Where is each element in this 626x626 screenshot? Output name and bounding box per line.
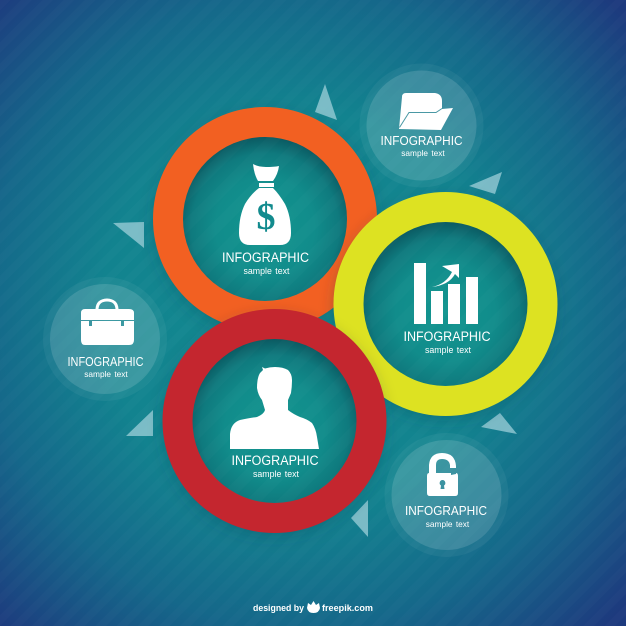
label: folder: sample text (401, 148, 445, 158)
triangle upper right (469, 172, 502, 194)
label: money (222, 250, 309, 276)
small circle: briefcase (43, 277, 167, 401)
label: chart: sample text (425, 345, 472, 355)
triangle bottom (351, 500, 368, 537)
triangle lower left (126, 410, 153, 436)
label: chart (404, 329, 491, 355)
triangles (113, 84, 517, 537)
icon: money bag (239, 164, 291, 245)
small circle: padlock (384, 433, 508, 557)
label: money: INFOGRAPHIC (222, 250, 309, 265)
label: briefcase: INFOGRAPHIC (68, 355, 144, 369)
ring: yellow (333, 192, 558, 421)
label: money: sample text (244, 266, 290, 276)
triangle top (315, 84, 337, 120)
triangle lower right (481, 413, 517, 434)
label: chart: INFOGRAPHIC (404, 329, 491, 344)
icon: bar chart (414, 263, 478, 324)
arrow (432, 264, 459, 287)
icon: folder (399, 93, 453, 130)
label: briefcase: sample text (84, 369, 128, 379)
credit (253, 601, 373, 613)
label: person (232, 453, 319, 479)
label: person: INFOGRAPHIC (232, 453, 319, 468)
label: folder (380, 134, 462, 158)
icon: person (230, 367, 319, 449)
ring: red (162, 309, 386, 538)
icon: padlock (427, 453, 458, 496)
small circle: folder (360, 64, 484, 188)
label: folder: INFOGRAPHIC (380, 134, 462, 148)
ring: orange (153, 107, 377, 336)
label: person: sample text (253, 469, 300, 479)
triangle left (113, 222, 144, 248)
label: padlock (405, 504, 487, 529)
label: padlock: INFOGRAPHIC (405, 504, 487, 518)
label: padlock: sample text (426, 519, 470, 529)
dollar sign: $ (256, 196, 276, 238)
credit: designed by (253, 603, 304, 613)
icon: freepik logo (307, 601, 320, 613)
icon: briefcase (81, 298, 134, 345)
credit: freepik.com (322, 603, 373, 613)
label: briefcase (68, 355, 144, 379)
